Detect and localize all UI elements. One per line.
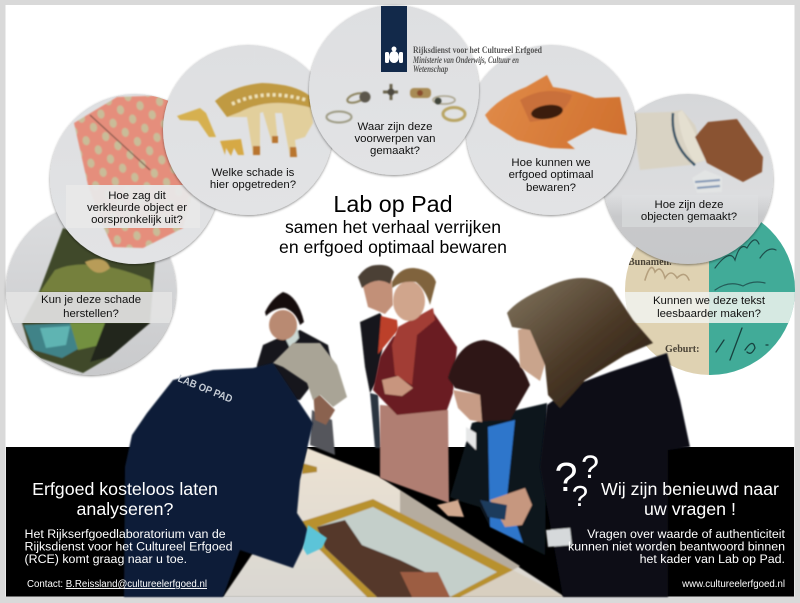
- terracotta fish: [485, 75, 627, 149]
- circle: shards: objecten gemaakt?: [641, 211, 737, 223]
- circle: document: [625, 222, 795, 375]
- person: dark-haired woman: [437, 340, 547, 555]
- circle: comb: hier opgetreden?: [210, 179, 296, 191]
- blue glove: [303, 525, 327, 555]
- crest icon: [385, 46, 403, 63]
- icon: question marks: [555, 449, 599, 513]
- circle: fish: erfgoed optimaal: [509, 169, 593, 181]
- parchment half: [625, 246, 709, 375]
- logo bar: [381, 6, 407, 72]
- caption text: Hoe zijn deze: [654, 199, 724, 211]
- logo text: Wetenschap: [413, 65, 448, 75]
- iridescent glass shard: [22, 228, 155, 373]
- circle: textile: oorspronkelijk uit?: [91, 214, 183, 226]
- caption text: Hoe kunnen we: [511, 157, 591, 169]
- title: [279, 191, 507, 257]
- caption band: [622, 195, 758, 227]
- circle: textile: verkleurde object er: [87, 202, 187, 214]
- left heading: [32, 479, 218, 519]
- sweater: [373, 312, 457, 415]
- circle: rings: voorwerpen van: [354, 133, 436, 145]
- right paragraph: kunnen niet worden beantwoord binnen: [568, 540, 785, 554]
- caption text: Kunnen we deze tekst: [653, 295, 766, 307]
- right heading: [601, 479, 779, 519]
- right paragraph: [568, 527, 786, 566]
- circle: glass damage: herstellen?: [63, 308, 119, 320]
- jacket: [540, 353, 690, 597]
- blue shirt: [488, 420, 523, 543]
- circle: shards: [603, 94, 773, 264]
- hands: [382, 376, 413, 396]
- table with paintings: [223, 448, 565, 597]
- caption band: [624, 292, 796, 323]
- icon: question marks: ?: [555, 454, 577, 500]
- jacket: [450, 403, 547, 555]
- caption band: [86, 185, 193, 228]
- painting buildings: [400, 572, 450, 597]
- person: woman in back left: [257, 292, 335, 455]
- caption text: Kun je deze schade: [41, 294, 141, 306]
- handwriting: [645, 240, 786, 360]
- logo text: [412, 46, 543, 75]
- logo text: Rijksdienst voor het Cultureel Erfgoed: [413, 46, 543, 56]
- painting dark landscape: [317, 520, 450, 597]
- table shadow area: [400, 490, 520, 570]
- right paragraph: Vragen over waarde of authenticiteit: [587, 527, 786, 541]
- amber comb: [177, 83, 313, 157]
- left paragraph: [24, 527, 233, 566]
- pink textile with flowers: [74, 95, 195, 248]
- hair: [392, 268, 436, 305]
- painting sky: [317, 507, 497, 597]
- circle: fish: [466, 45, 636, 215]
- teal half: [709, 222, 795, 375]
- circle: glass damage: [0, 205, 176, 375]
- contact: Contact: B.Reissland@cultureelerfgoed.nl: [27, 579, 207, 590]
- gold frame: [300, 499, 513, 597]
- left paragraph: (RCE) komt graag naar u toe.: [24, 552, 187, 566]
- website: www.cultureelerfgoed.nl: [681, 579, 785, 590]
- table top: [223, 448, 565, 597]
- face: [518, 325, 550, 381]
- right paragraph: het kader van Lab op Pad.: [640, 552, 785, 566]
- table right corner: [460, 570, 565, 597]
- logo text: Ministerie van Onderwijs, Cultuur en: [412, 56, 519, 66]
- trousers: [380, 405, 449, 503]
- neck: [286, 326, 299, 348]
- text block: left: [24, 479, 233, 590]
- logo: Rijksdienst: [381, 6, 543, 75]
- hair: [358, 265, 394, 288]
- hand on table: [437, 500, 464, 517]
- phone: [480, 500, 507, 520]
- caption band: [0, 292, 172, 323]
- person: worker bending over: [124, 343, 347, 597]
- right heading: uw vragen !: [644, 499, 736, 519]
- ceramic shards: [635, 110, 763, 193]
- printed form labels: [628, 257, 699, 355]
- left paragraph: Het Rijkserfgoedlaboratorium van de: [24, 527, 226, 541]
- navy overall: [124, 363, 313, 597]
- jacket and trousers: [257, 330, 331, 400]
- shirt: [378, 316, 398, 354]
- hair: [448, 340, 530, 421]
- badge: [546, 528, 572, 547]
- name badge: [466, 427, 476, 450]
- person: woman in red: [373, 268, 457, 503]
- caption text: Waar zijn deze: [358, 121, 432, 133]
- left heading: Erfgoed kosteloos laten: [32, 479, 218, 499]
- person: man: [358, 265, 398, 448]
- caption text: Welke schade is: [212, 167, 295, 179]
- icon: question marks: ?: [572, 481, 588, 513]
- left heading: analyseren?: [77, 499, 174, 519]
- small painting behind: [302, 463, 317, 474]
- jacket: [360, 313, 388, 393]
- phone hand: [490, 488, 532, 527]
- face: [393, 281, 425, 321]
- person: woman in front right: [507, 278, 690, 597]
- title: Lab op Pad: [333, 191, 453, 217]
- grey hair: [273, 343, 347, 407]
- scarf: [392, 308, 435, 385]
- face: [269, 310, 297, 340]
- jeans: [370, 393, 381, 448]
- right heading: Wij zijn benieuwd naar: [601, 479, 779, 499]
- face: [313, 388, 335, 425]
- left paragraph: Rijksdienst voor het Cultureel Erfgoed: [24, 540, 233, 554]
- circle: comb: [163, 45, 333, 215]
- icon: question marks: ?: [581, 449, 599, 485]
- face: [362, 280, 393, 314]
- printed form labels: Bunamen.: [628, 257, 672, 268]
- metal rings: [326, 84, 465, 122]
- hair: [265, 292, 304, 325]
- face: [453, 390, 482, 422]
- title: en erfgoed optimaal bewaren: [279, 237, 507, 257]
- circle: textile: [50, 94, 220, 264]
- printed form labels: Geburt:: [665, 344, 699, 355]
- circle: fish: bewaren?: [526, 182, 576, 194]
- black band: [6, 447, 794, 596]
- title: samen het verhaal verrijken: [285, 217, 501, 237]
- back print: LAB OP PAD: [176, 373, 234, 406]
- circle: rings: [309, 5, 479, 175]
- circle: document: leesbaarder maken?: [657, 308, 761, 320]
- circle: rings: gemaakt?: [370, 145, 420, 157]
- caption text: Hoe zag dit: [108, 190, 167, 202]
- hair: [507, 278, 653, 408]
- text block: right: [568, 479, 786, 590]
